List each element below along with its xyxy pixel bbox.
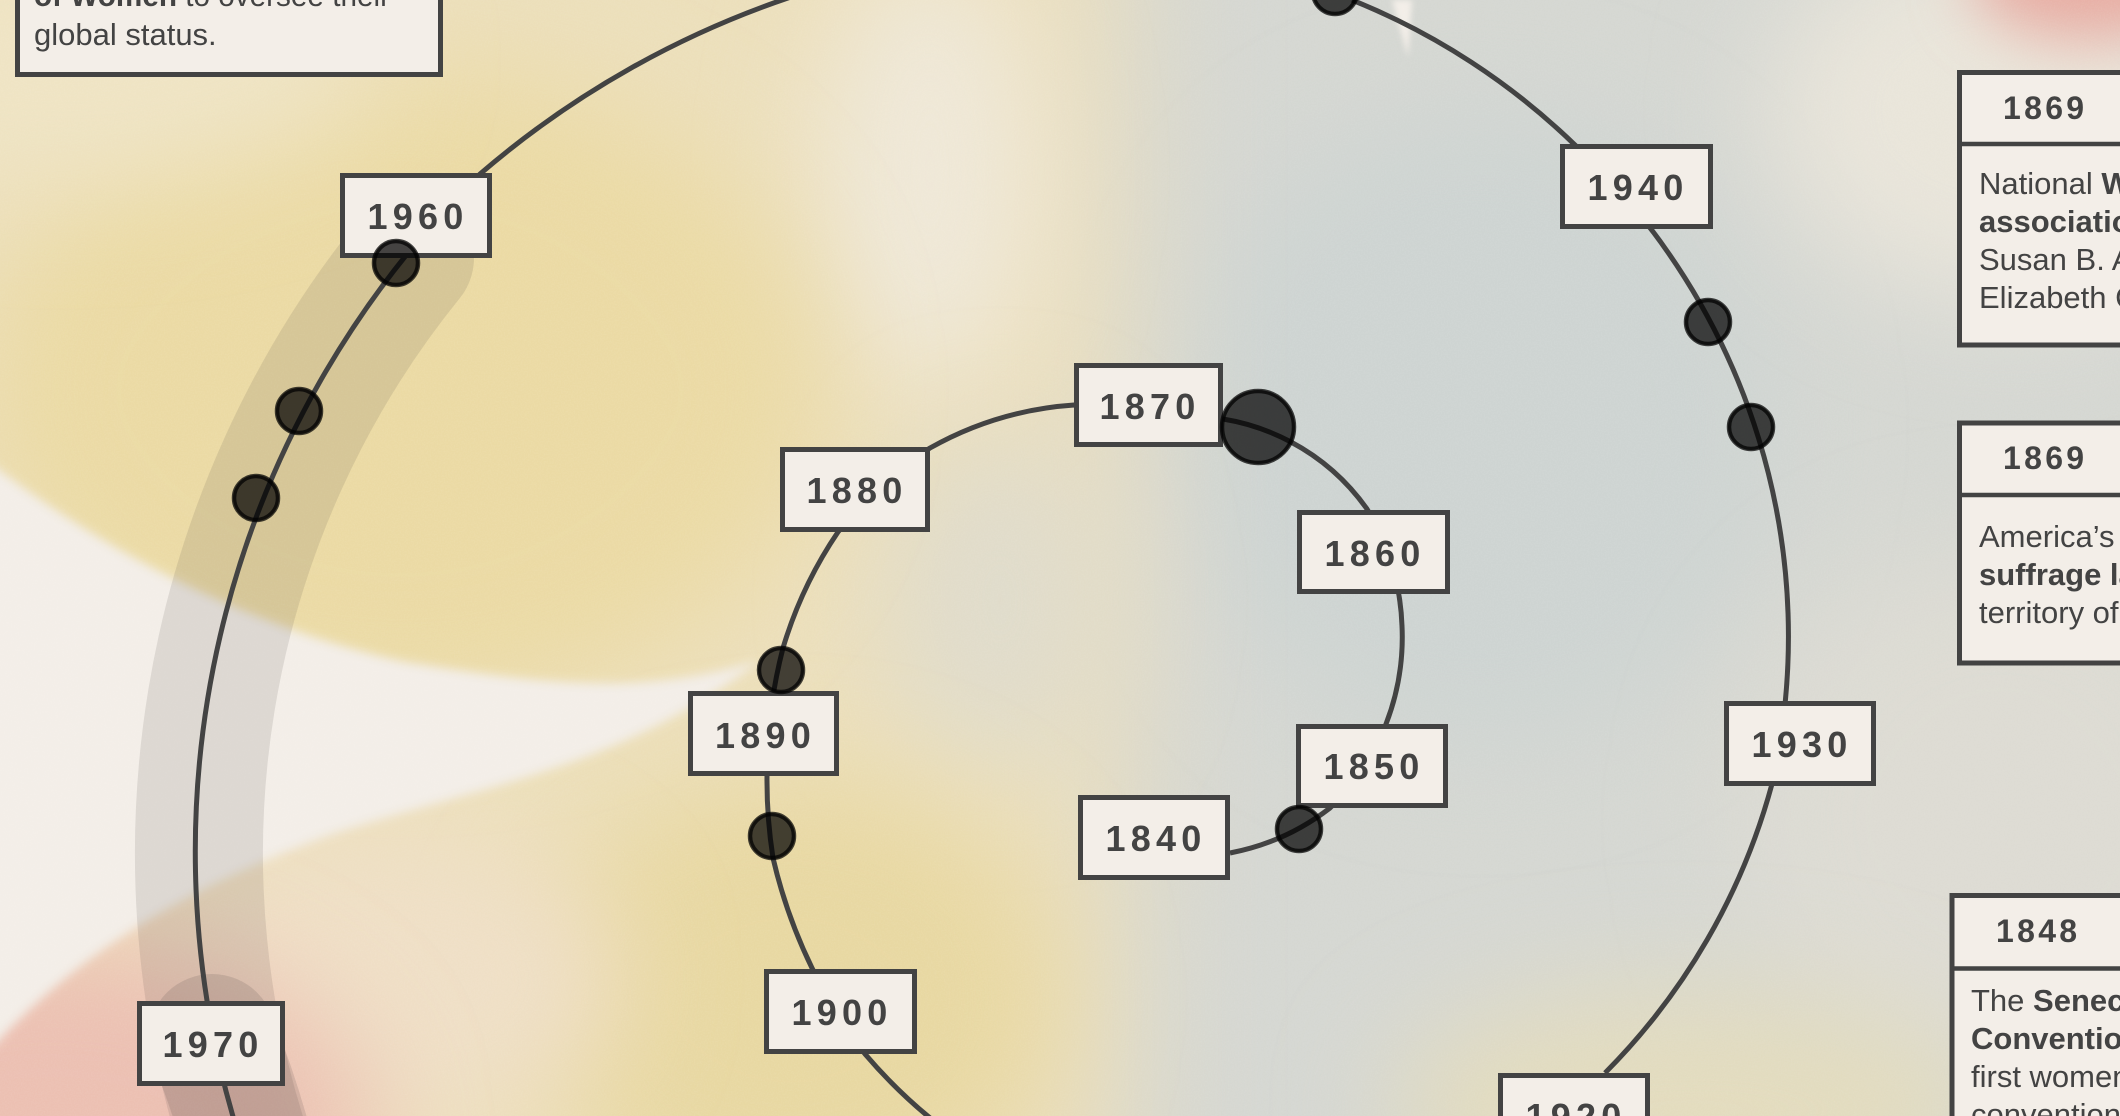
card: 1869 National Woman Suffrage Association: 1869 xyxy=(2003,90,2087,126)
year marker 1890: 1890 xyxy=(715,715,816,756)
year marker 1900 xyxy=(766,972,914,1052)
event dot: large 1869 xyxy=(1221,390,1295,464)
event dot xyxy=(233,475,279,521)
year marker 1940 xyxy=(1562,146,1710,226)
card: 1848 Seneca Falls: 1848 xyxy=(1996,913,2080,949)
year marker 1960: 1960 xyxy=(368,196,468,237)
year marker 1870 xyxy=(1076,366,1220,444)
event dot xyxy=(1276,806,1322,852)
card: 1869 first suffrage law: territory of xyxy=(1979,595,2119,630)
year marker 1930 xyxy=(1726,704,1874,784)
event dot xyxy=(758,647,804,693)
card: 1869 first suffrage law xyxy=(1959,423,2120,663)
year marker 1880 xyxy=(782,450,928,530)
year marker 1880: 1880 xyxy=(807,470,907,511)
card: 1869 National Woman Suffrage Association xyxy=(1959,72,2120,345)
event dot xyxy=(1728,404,1774,450)
highlight band along the 1960s and 1970s xyxy=(199,258,410,1116)
year marker 1970: 1970 xyxy=(163,1024,263,1065)
spiral timeline line xyxy=(195,0,1788,1116)
year marker 1840: 1840 xyxy=(1106,818,1206,859)
year marker 1890 xyxy=(690,694,836,774)
event dot xyxy=(1685,299,1731,345)
event dot xyxy=(1312,0,1358,15)
event dot xyxy=(373,240,419,286)
year marker 1930: 1930 xyxy=(1752,724,1852,765)
year marker 1960 xyxy=(342,176,490,256)
year marker 1870: 1870 xyxy=(1100,386,1200,427)
event dot xyxy=(749,813,795,859)
year marker 1920 xyxy=(1500,1076,1648,1116)
white streak xyxy=(1392,0,1412,57)
callout: top left: global status. xyxy=(34,17,217,52)
year marker 1860 xyxy=(1300,512,1448,592)
year marker 1900: 1900 xyxy=(792,992,892,1033)
card: 1848 Seneca Falls xyxy=(1952,896,2120,1116)
year marker 1940: 1940 xyxy=(1588,167,1688,208)
event dot xyxy=(276,388,322,434)
year marker 1860: 1860 xyxy=(1325,533,1425,574)
year marker 1850 xyxy=(1298,726,1446,806)
year marker 1840 xyxy=(1080,798,1228,878)
year marker 1850: 1850 xyxy=(1324,746,1424,787)
year marker 1970 xyxy=(140,1004,282,1084)
card: 1869 first suffrage law: 1869 xyxy=(2003,440,2087,476)
callout: top left xyxy=(18,0,440,74)
